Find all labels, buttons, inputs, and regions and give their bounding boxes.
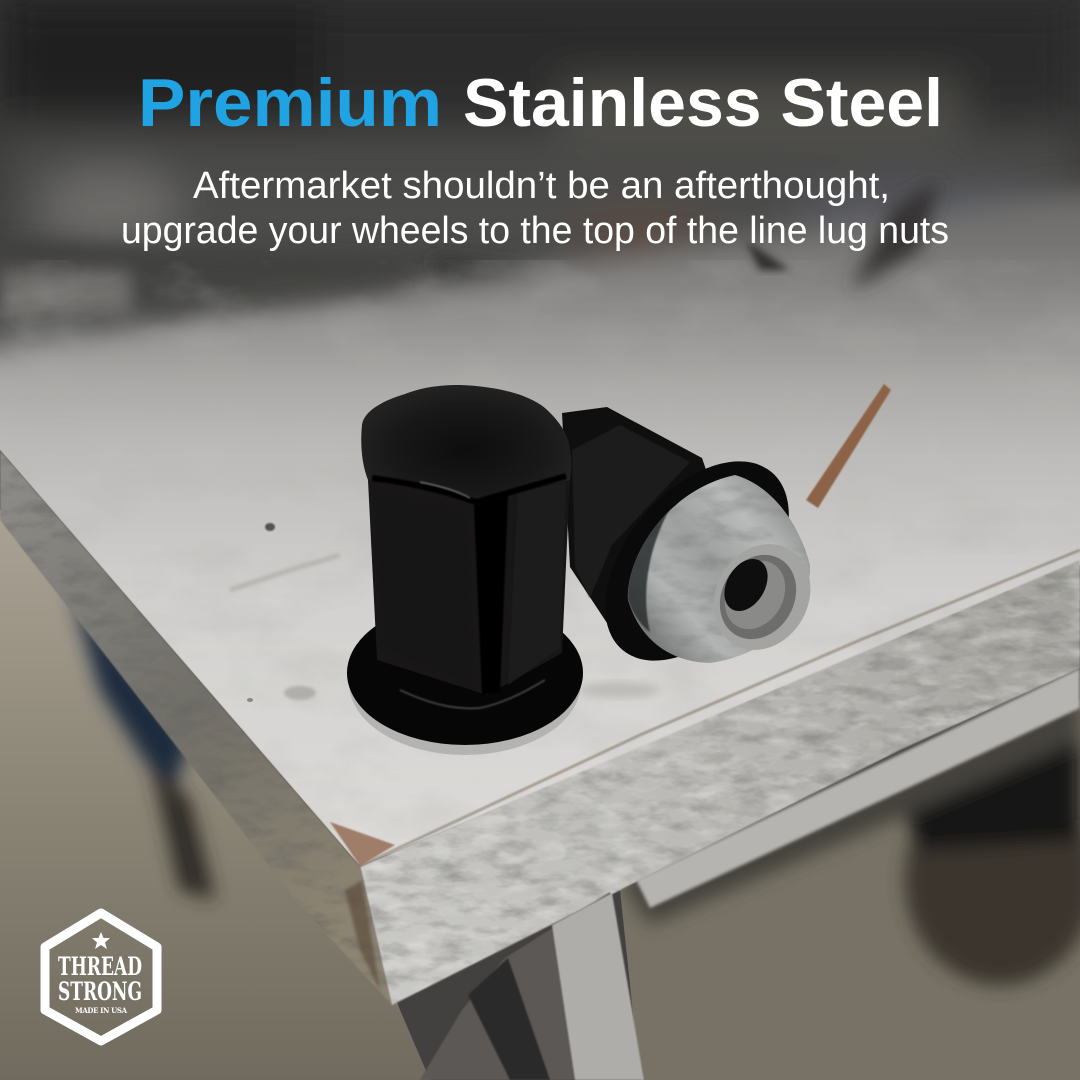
front lug nut: [347, 385, 583, 755]
subtitle: upgrade your wheels to the top of the line lug nuts: [121, 210, 949, 252]
back nut washer: [569, 427, 825, 695]
star: [92, 932, 110, 949]
top dome: [361, 385, 571, 503]
back nut surface wear: [628, 486, 810, 660]
center facet: [474, 495, 508, 695]
back nut steel dome: [628, 475, 810, 663]
title: Stainless Steel: [463, 65, 943, 141]
floor: [0, 510, 430, 1080]
nut hex body: [368, 477, 570, 695]
concrete texture on table edge: [0, 440, 1080, 1010]
table right face: [360, 560, 1080, 1005]
title: Premium: [138, 65, 442, 141]
logo: Thread Strong badge: MADE IN USA: [75, 1006, 128, 1015]
pencil: [806, 384, 891, 508]
table left face: [0, 450, 392, 1005]
surface specks: [265, 523, 275, 531]
subtitle: [121, 165, 949, 252]
steel washer rim: [349, 611, 581, 755]
left and right facets: [375, 492, 474, 688]
distant tools on the table: [850, 180, 940, 290]
table top surface: [0, 179, 1080, 866]
back lug nut: [562, 407, 810, 663]
blurred workshop background: [0, 0, 1080, 260]
flange: [347, 601, 583, 745]
logo text: THREAD: [58, 952, 142, 981]
dark base under table: [70, 590, 1080, 985]
threaded hole: [695, 526, 829, 668]
subtitle: Aftermarket shouldn’t be an afterthought,: [193, 165, 890, 207]
table leg: [420, 892, 644, 1080]
back nut body: [562, 407, 730, 640]
logo: Thread Strong badge: STRONG: [58, 977, 142, 1006]
logo: Thread Strong badge: [45, 913, 157, 1041]
gloss highlights: [372, 476, 566, 502]
lower shelf: [636, 668, 1080, 908]
title: [138, 65, 943, 141]
